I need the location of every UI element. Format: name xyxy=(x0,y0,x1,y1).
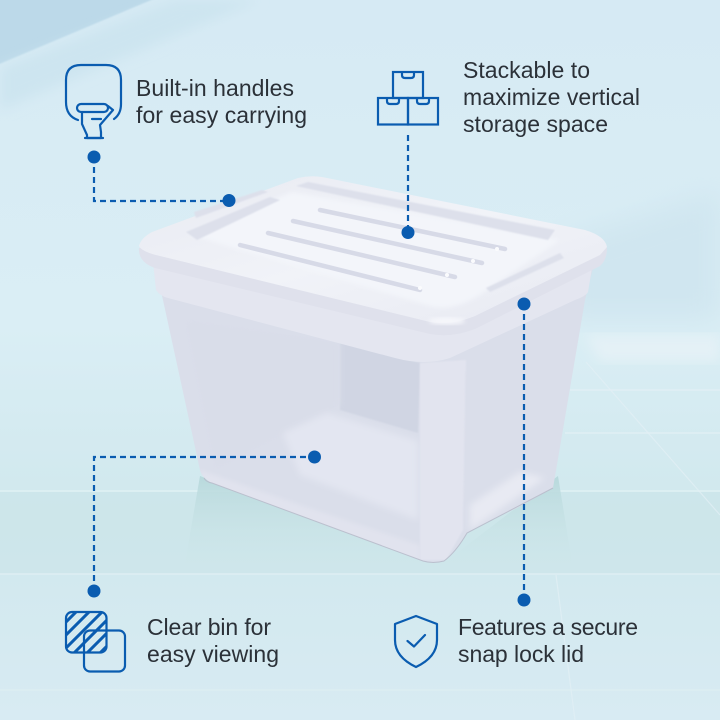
product: clear storage bin with lid xyxy=(139,176,610,580)
text: clear bin xyxy=(147,614,279,667)
lid corner highlight xyxy=(429,318,465,324)
text: stackable: Stackable to xyxy=(463,57,590,83)
box floor reflection xyxy=(183,476,574,575)
text: snap lock lid xyxy=(458,614,638,667)
rib highlights xyxy=(418,247,499,290)
lid top inset xyxy=(190,192,560,308)
text: stackable xyxy=(463,57,640,137)
lid xyxy=(139,176,607,323)
bin rim band xyxy=(153,262,592,362)
text: built-in handles xyxy=(136,75,307,128)
text: clear bin: Clear bin for xyxy=(147,614,271,640)
bin bottom band xyxy=(205,478,210,482)
bin right panel xyxy=(465,300,585,525)
text: clear bin: easy viewing xyxy=(147,641,279,667)
icon: shield with check xyxy=(395,616,437,667)
bin inner back panel xyxy=(340,342,420,433)
bin front corner pillar xyxy=(421,364,425,526)
icon: overlapping squares with hatch xyxy=(64,610,126,673)
lid handle recesses xyxy=(186,182,564,292)
icon: hand carrying by handle xyxy=(66,65,121,138)
text: snap lock lid: Features a secure xyxy=(458,614,638,640)
text: snap lock lid: snap lock lid xyxy=(458,641,584,667)
text: stackable: maximize vertical xyxy=(463,84,640,110)
callout connectors xyxy=(94,135,524,600)
callout dots xyxy=(88,150,530,606)
text: built-in handles: for easy carrying xyxy=(136,102,307,128)
bin floor xyxy=(290,418,413,512)
lid side xyxy=(139,248,607,335)
bin bottom edge xyxy=(204,478,553,562)
bin body xyxy=(162,270,592,562)
text: stackable: storage space xyxy=(463,111,608,137)
icon: stacked boxes xyxy=(378,72,438,124)
text: built-in handles: Built-in handles xyxy=(136,75,294,101)
lid ribs xyxy=(240,210,505,290)
